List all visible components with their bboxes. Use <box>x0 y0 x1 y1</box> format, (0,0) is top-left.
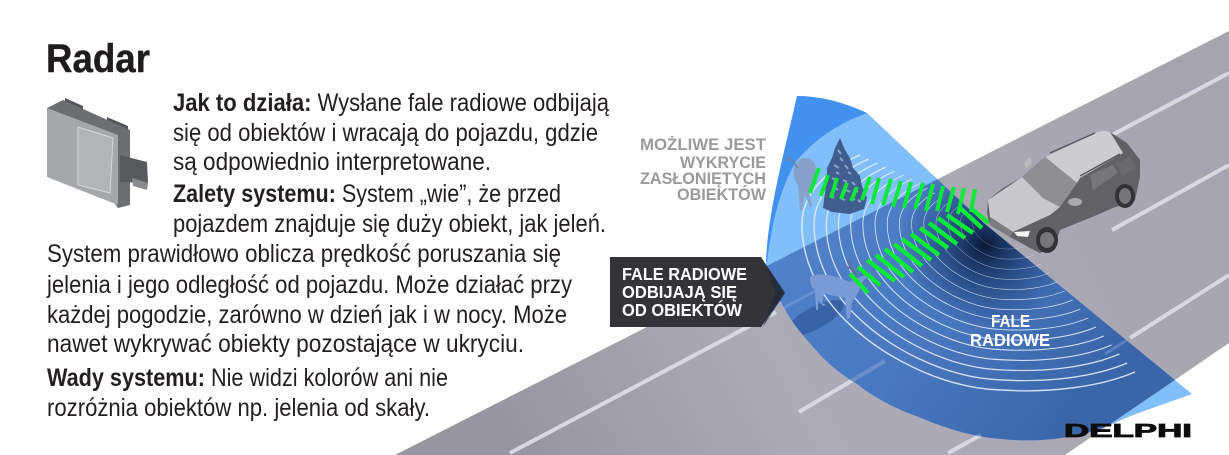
disadvantages paragraph <box>47 364 448 422</box>
advantages paragraph: jelenia i jego odległość od pojazdu. Może działać przy <box>46 271 572 299</box>
label: hidden objects: OBIEKTÓW <box>677 185 767 204</box>
callout: waves bounce off objects: FALE RADIOWE <box>622 264 747 284</box>
label: hidden objects <box>640 135 767 204</box>
how it works paragraph <box>173 89 609 176</box>
how it works paragraph: są odpowiednio interpretowane. <box>173 148 491 176</box>
advantages paragraph: Zalety systemu: System „wie”, że przed <box>173 180 561 208</box>
radio wave arcs <box>802 155 1135 391</box>
green reflected waves <box>810 168 989 293</box>
advantages paragraph: nawet wykrywać obiekty pozostające w ukryciu. <box>47 330 524 358</box>
logo: Delphi: DELPHI <box>1064 421 1192 441</box>
how it works paragraph: Jak to działa: Wysłane fale radiowe odbijają <box>173 89 609 117</box>
icon: radar module <box>47 98 148 208</box>
label: radio waves: RADIOWE <box>970 330 1050 350</box>
callout: waves bounce off objects: ODBIJAJĄ SIĘ <box>622 282 737 302</box>
deer in front <box>810 261 872 319</box>
label: radio waves: FALE <box>991 311 1030 331</box>
disadvantages paragraph: Wady systemu: Nie widzi kolorów ani nie <box>47 364 448 392</box>
label: hidden objects: MOŻLIWE JEST <box>640 135 767 154</box>
how it works paragraph: się od obiektów i wracają do pojazdu, gdzie <box>173 119 598 147</box>
tree hidden behind <box>823 138 867 214</box>
advantages paragraph <box>46 180 606 358</box>
disadvantages paragraph: rozróżnia obiektów np. jelenia od skały. <box>47 394 430 422</box>
text block: description <box>46 89 609 422</box>
road <box>395 31 1229 455</box>
label: radio waves <box>970 311 1050 350</box>
radar cone <box>766 96 1192 440</box>
label: hidden objects: WYKRYCIE <box>680 153 766 172</box>
deer behind tree <box>786 155 816 210</box>
advantages paragraph: każdej pogodzie, zarówno w dzień jak i w nocy. Może <box>47 301 567 329</box>
label: hidden objects: ZASŁONIĘTYCH <box>640 169 766 188</box>
callout: waves bounce off objects <box>610 257 785 327</box>
car <box>987 131 1140 253</box>
advantages paragraph: pojazdem znajduje się duży obiekt, jak jeleń. <box>173 210 606 238</box>
callout: waves bounce off objects: OD OBIEKTÓW <box>622 299 742 320</box>
advantages paragraph: System prawidłowo oblicza prędkość poruszania się <box>47 240 561 268</box>
title: Radar <box>46 37 150 81</box>
